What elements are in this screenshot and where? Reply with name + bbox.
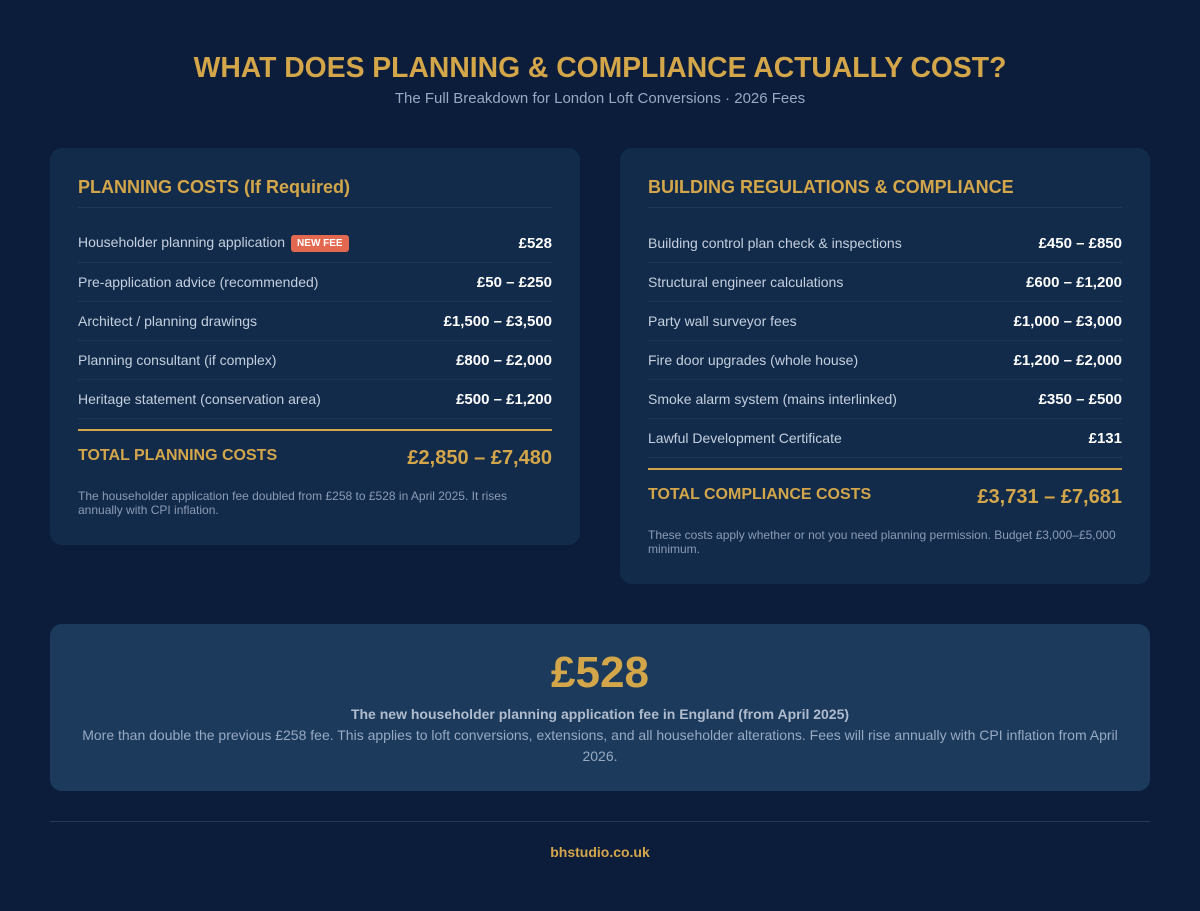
row: Building control plan check & inspections bbox=[648, 235, 902, 251]
row bbox=[648, 302, 1122, 341]
total bbox=[648, 468, 1122, 528]
row: Structural engineer calculations bbox=[648, 274, 843, 290]
panel heading: PLANNING COSTS (If Required) bbox=[78, 177, 350, 197]
row: Pre-application advice (recommended) bbox=[78, 274, 318, 290]
total: £3,731 – £7,681 bbox=[977, 486, 1122, 508]
row: Planning consultant (if complex) bbox=[78, 352, 276, 368]
total bbox=[78, 429, 552, 489]
row: NEW FEE bbox=[297, 238, 343, 249]
row: £500 – £1,200 bbox=[456, 390, 552, 408]
panel: building regulations bbox=[620, 148, 1150, 584]
row: £1,500 – £3,500 bbox=[444, 312, 552, 330]
row: Fire door upgrades (whole house) bbox=[648, 352, 858, 368]
row bbox=[648, 419, 1122, 458]
footer: bhstudio.co.uk bbox=[550, 844, 650, 860]
row bbox=[78, 263, 552, 302]
total: £2,850 – £7,480 bbox=[407, 447, 552, 469]
big number: £528 bbox=[551, 648, 649, 697]
row bbox=[78, 302, 552, 341]
panel heading bbox=[78, 176, 552, 208]
note: These costs apply whether or not you need planning permission. Budget £3,000–£5,000 minimum. bbox=[648, 528, 1116, 556]
callout text: More than double the previous £258 fee. This applies to loft conversions, extensions, and all householder alterations. Fees will rise annually with CPI inflation from April 2026. bbox=[82, 727, 1118, 764]
row: Architect / planning drawings bbox=[78, 313, 257, 329]
row bbox=[648, 224, 1122, 263]
total: TOTAL PLANNING COSTS bbox=[78, 447, 277, 464]
row bbox=[648, 341, 1122, 380]
callout: new fee bbox=[50, 624, 1150, 791]
row bbox=[78, 224, 552, 263]
panel heading bbox=[648, 176, 1122, 208]
row: Householder planning application bbox=[78, 234, 285, 250]
row: £528 bbox=[519, 234, 552, 252]
row bbox=[78, 380, 552, 419]
row bbox=[78, 341, 552, 380]
row: £350 – £500 bbox=[1039, 390, 1122, 408]
row: Smoke alarm system (mains interlinked) bbox=[648, 391, 897, 407]
row: £1,000 – £3,000 bbox=[1014, 312, 1122, 330]
callout text: The new householder planning application fee in England (from April 2025) bbox=[351, 706, 849, 722]
row: £1,200 – £2,000 bbox=[1014, 352, 1122, 368]
row: £800 – £2,000 bbox=[456, 352, 552, 368]
subtitle: The Full Breakdown for London Loft Conversions · 2026 Fees bbox=[395, 90, 805, 107]
row: £131 bbox=[1089, 430, 1122, 446]
row: £450 – £850 bbox=[1039, 234, 1122, 252]
total: TOTAL COMPLIANCE COSTS bbox=[648, 486, 871, 503]
row: Heritage statement (conservation area) bbox=[78, 391, 321, 407]
row bbox=[648, 263, 1122, 302]
row: Party wall surveyor fees bbox=[648, 313, 797, 329]
callout text bbox=[82, 706, 1118, 764]
panel: planning costs bbox=[50, 148, 580, 545]
panel heading: BUILDING REGULATIONS & COMPLIANCE bbox=[648, 177, 1014, 197]
note: The householder application fee doubled from £258 to £528 in April 2025. It rises annually with CPI inflation. bbox=[78, 489, 507, 517]
row bbox=[648, 380, 1122, 419]
title: WHAT DOES PLANNING & COMPLIANCE ACTUALLY COST? bbox=[194, 51, 1006, 83]
row: £600 – £1,200 bbox=[1026, 274, 1122, 290]
row: £50 – £250 bbox=[477, 274, 552, 290]
row: Lawful Development Certificate bbox=[648, 430, 842, 446]
